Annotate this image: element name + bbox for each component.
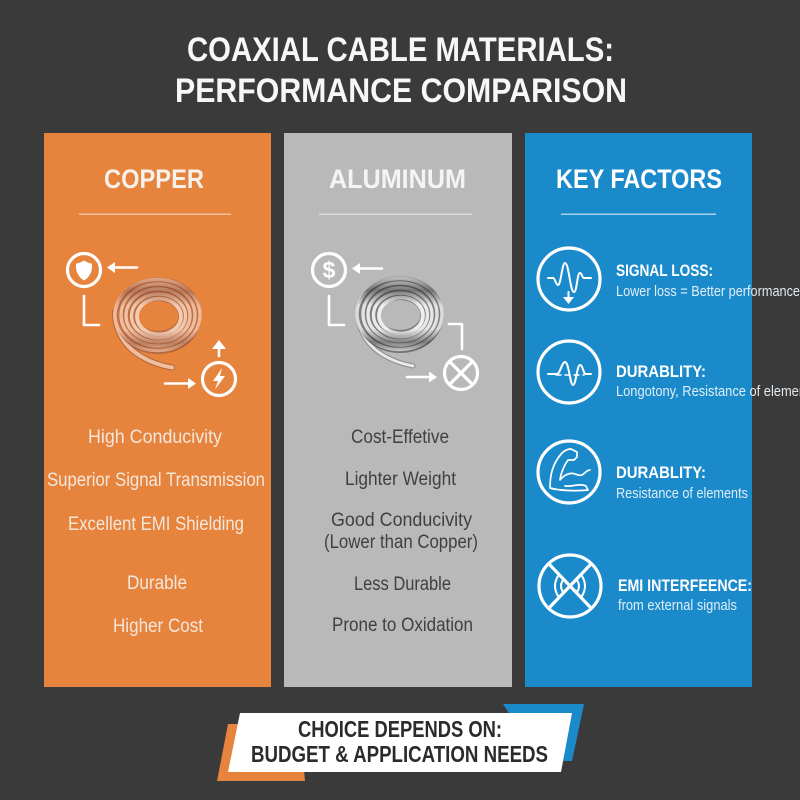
callout text: CHOICE DEPENDS ON: bbox=[298, 716, 502, 742]
factor: emi interference: from external signals bbox=[618, 597, 737, 614]
callout text bbox=[251, 716, 548, 767]
factor: durability longevity: DURABLITY: bbox=[616, 362, 706, 381]
copper list: Superior Signal Transmission bbox=[47, 470, 265, 491]
aluminum list: (Lower than Copper) bbox=[324, 532, 478, 553]
icon: lightning bolt bbox=[202, 362, 236, 396]
connector: shield to coil bbox=[84, 296, 99, 325]
title: COAXIAL CABLE MATERIALS: bbox=[187, 31, 614, 69]
icon: dollar bbox=[312, 254, 346, 286]
arrow: toward dollar bbox=[352, 263, 382, 274]
arrow: toward shield bbox=[107, 262, 137, 273]
heading: key factors: KEY FACTORS bbox=[556, 164, 722, 194]
copper list bbox=[47, 427, 265, 637]
connector: coil to cross bbox=[449, 324, 462, 349]
aluminum list: Cost-Effetive bbox=[351, 427, 449, 448]
icon: flexed arm bbox=[538, 441, 600, 503]
panel: aluminum bbox=[284, 133, 512, 687]
arrow: toward cross bbox=[407, 372, 437, 382]
factor: signal loss bbox=[616, 261, 800, 300]
arrow: up to bolt bbox=[212, 340, 226, 356]
icon: dollar: $ bbox=[323, 257, 336, 283]
title: PERFORMANCE COMPARISON bbox=[175, 72, 627, 110]
factor: durability resistance bbox=[616, 463, 748, 502]
copper list: High Conducivity bbox=[88, 427, 222, 448]
copper coil bbox=[115, 280, 200, 368]
callout text: BUDGET & APPLICATION NEEDS bbox=[251, 741, 548, 767]
icon: emi interference bbox=[539, 555, 601, 617]
aluminum list: Prone to Oxidation bbox=[332, 615, 473, 636]
factor: durability resistance: DURABLITY: bbox=[616, 463, 706, 482]
aluminum list: Good Conducivity bbox=[331, 510, 472, 531]
panel: copper bbox=[44, 133, 271, 687]
callout banner bbox=[217, 704, 584, 781]
heading: copper: COPPER bbox=[104, 164, 204, 194]
icon: crossed circle bbox=[444, 356, 478, 390]
factor: emi interference bbox=[618, 576, 752, 614]
copper list: Durable bbox=[127, 573, 187, 594]
arrow: toward bolt bbox=[165, 378, 196, 389]
connector: dollar to coil bbox=[329, 296, 344, 325]
factor: durability resistance: Resistance of elements bbox=[616, 485, 748, 502]
aluminum list bbox=[324, 427, 478, 636]
icon: shield bbox=[68, 254, 100, 286]
icon: signal loss bbox=[538, 248, 600, 310]
factor: signal loss: SIGNAL LOSS: bbox=[616, 261, 713, 280]
aluminum list: Lighter Weight bbox=[345, 469, 457, 490]
factor: durability longevity bbox=[616, 362, 800, 400]
heading: aluminum: ALUMINUM bbox=[329, 164, 466, 194]
aluminum list: Less Durable bbox=[354, 574, 451, 595]
icon: durability wave bbox=[538, 341, 600, 403]
copper list: Higher Cost bbox=[113, 616, 204, 637]
panel: key factors bbox=[525, 133, 800, 687]
copper list: Excellent EMI Shielding bbox=[68, 514, 244, 535]
factor: emi interference: EMI INTERFEENCE: bbox=[618, 576, 752, 595]
title bbox=[175, 31, 627, 110]
aluminum coil bbox=[357, 278, 442, 366]
